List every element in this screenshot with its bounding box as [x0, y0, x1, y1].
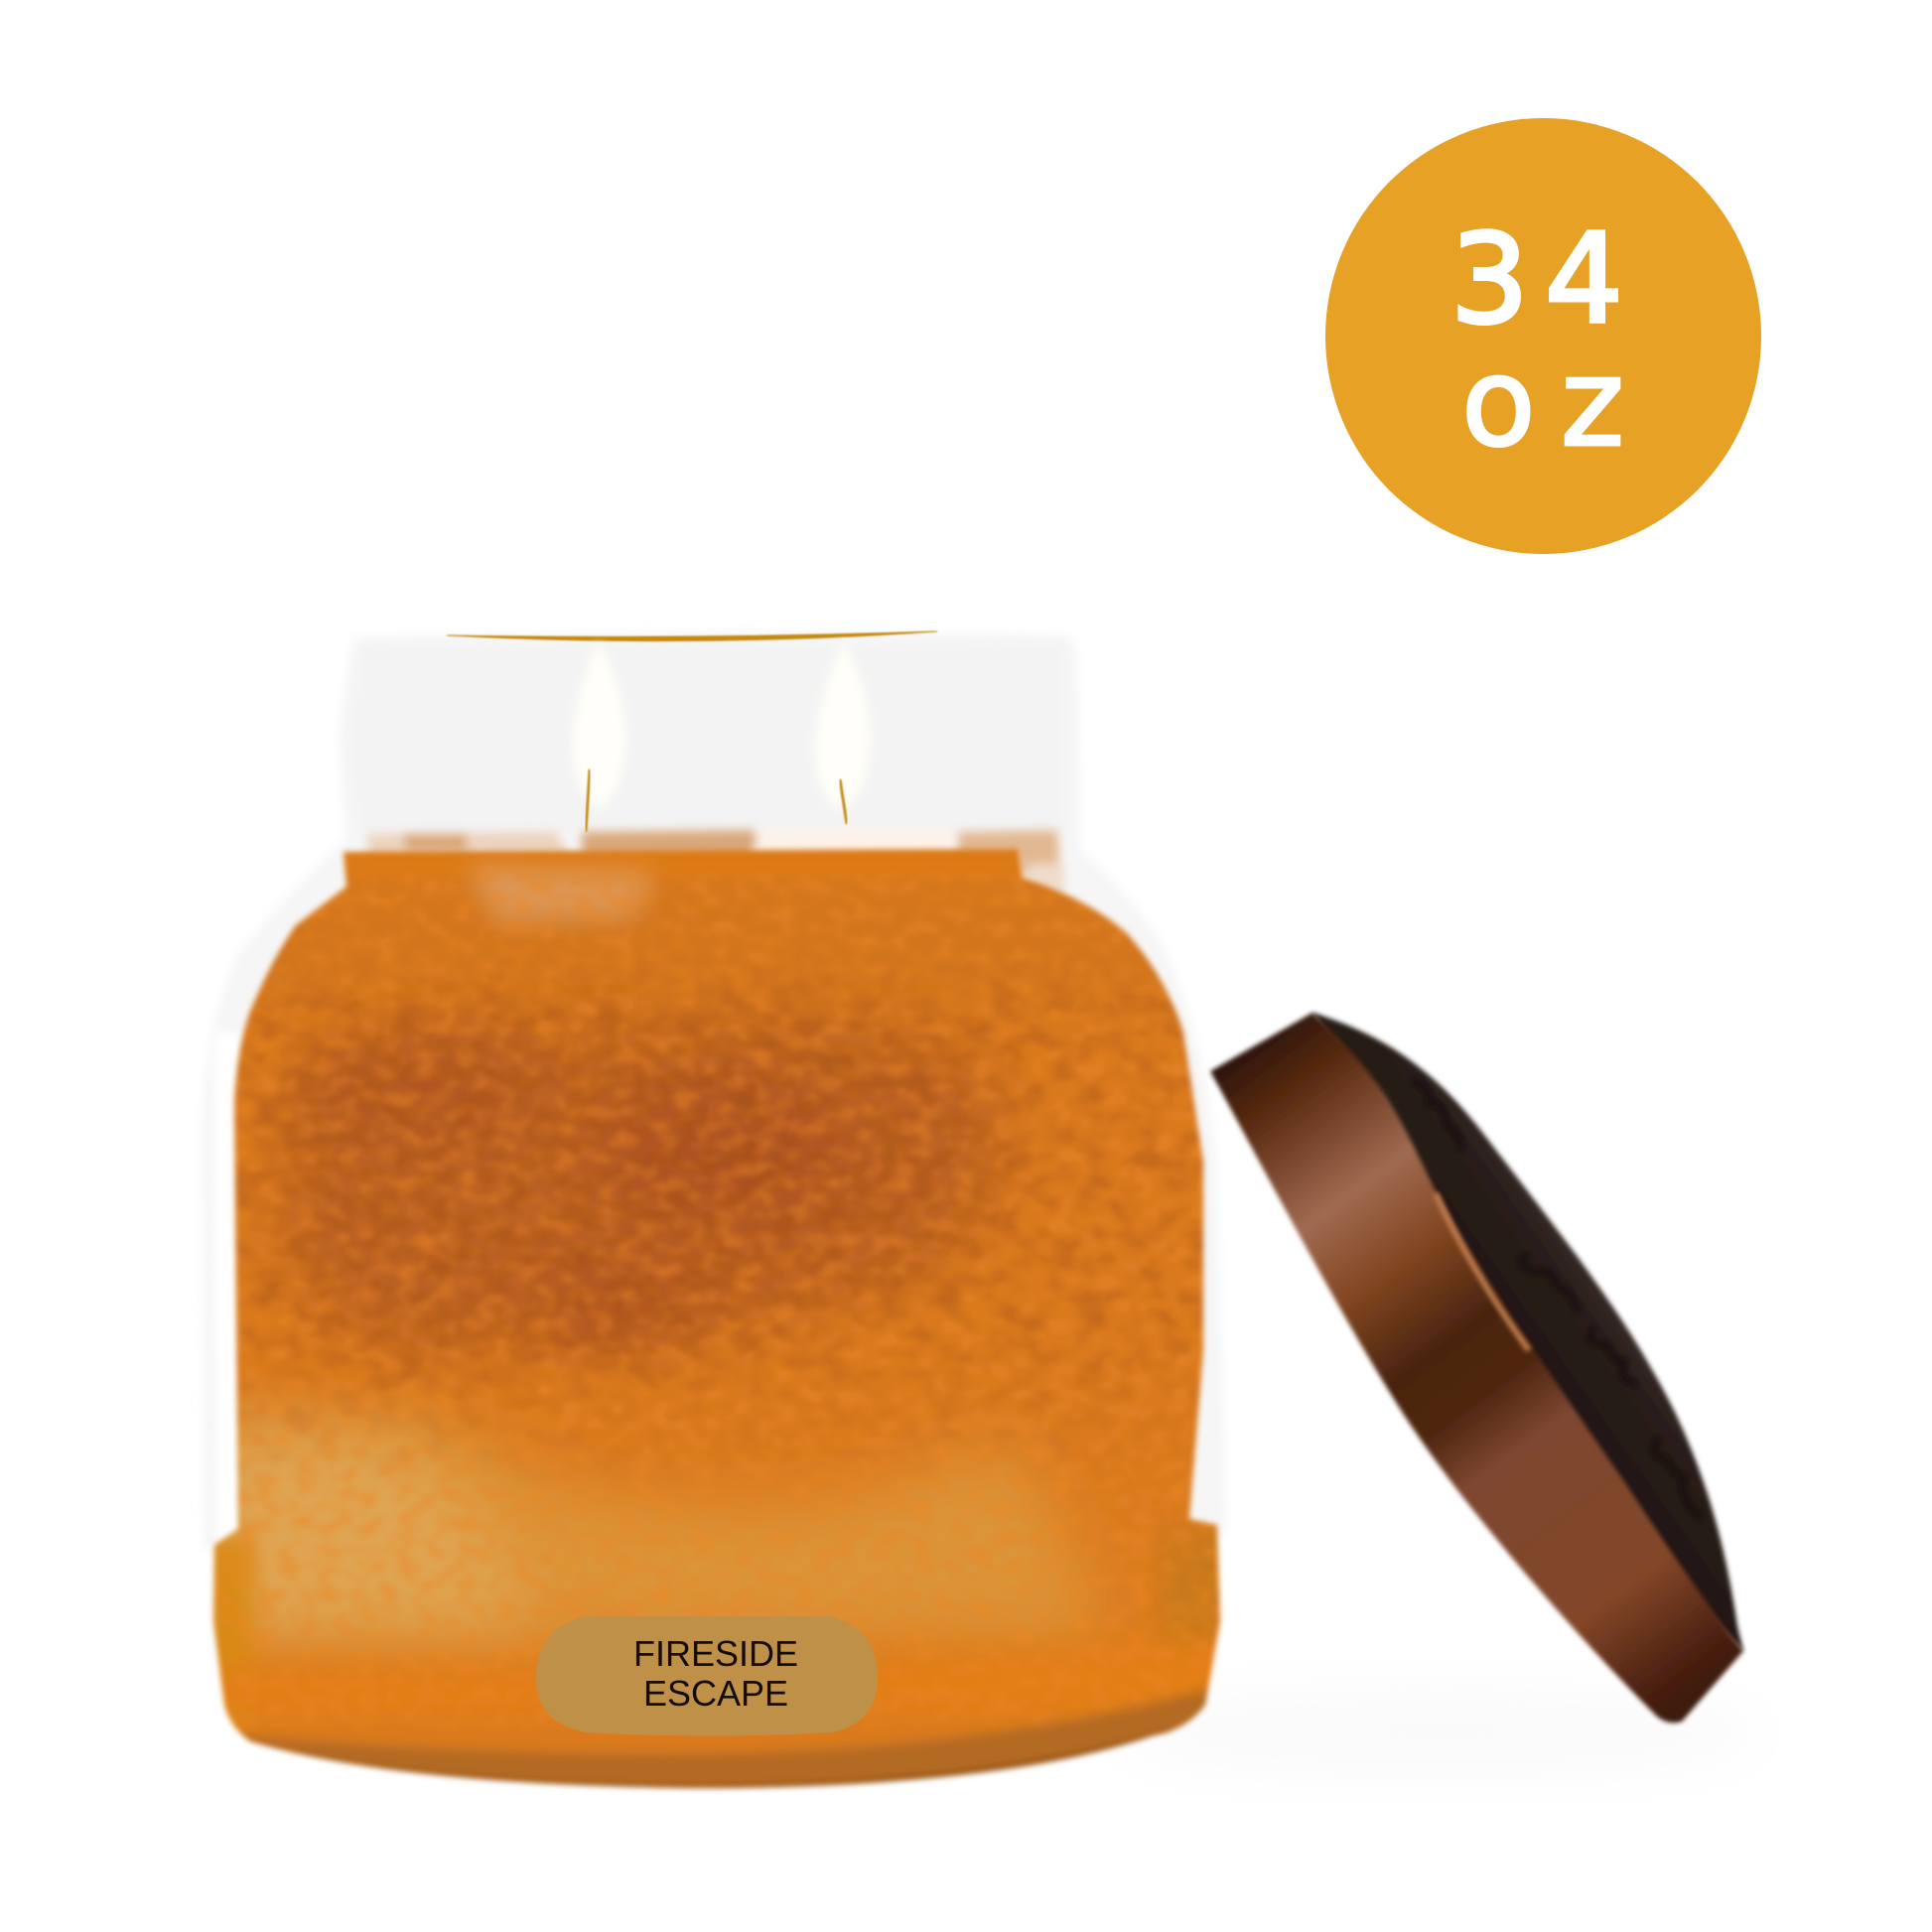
glass highlights	[214, 1033, 242, 1559]
melt pool reflections	[367, 828, 1064, 894]
wax shoulder tone	[238, 884, 1181, 1013]
lid	[1210, 1013, 1743, 1723]
label text line 1: FIRESIDE	[633, 1633, 798, 1674]
wick right	[840, 779, 847, 824]
wax lower rim	[204, 1539, 253, 1727]
flame right	[814, 640, 871, 809]
lid band	[1210, 1013, 1743, 1723]
wax top band	[328, 852, 1023, 876]
label text line 2: ESCAPE	[643, 1673, 788, 1714]
glass jar	[202, 631, 1227, 1549]
wax dark swirl overlay	[288, 1041, 981, 1340]
wax mottling dark	[235, 979, 1204, 1435]
wick left	[586, 769, 590, 832]
floor shadow	[1112, 1693, 1767, 1772]
lid highlight	[1436, 1193, 1529, 1350]
lid face	[1312, 1013, 1743, 1651]
badge: 34 oz	[1325, 118, 1761, 554]
candle rim glow	[447, 631, 937, 641]
flame left	[572, 640, 626, 809]
wax body	[199, 834, 1241, 1807]
lid embossing	[1415, 1082, 1700, 1517]
wax dark swirl	[278, 1017, 1006, 1360]
wax pale lower zone	[213, 1410, 1102, 1638]
jar label	[536, 1616, 878, 1735]
wax mottling light	[199, 874, 1241, 1727]
badge unit: oz	[1461, 333, 1624, 474]
badge number: 34	[1450, 208, 1623, 351]
wax base	[233, 1686, 1209, 1789]
candle jar	[199, 631, 1241, 1807]
glass neck shade	[349, 643, 1064, 834]
